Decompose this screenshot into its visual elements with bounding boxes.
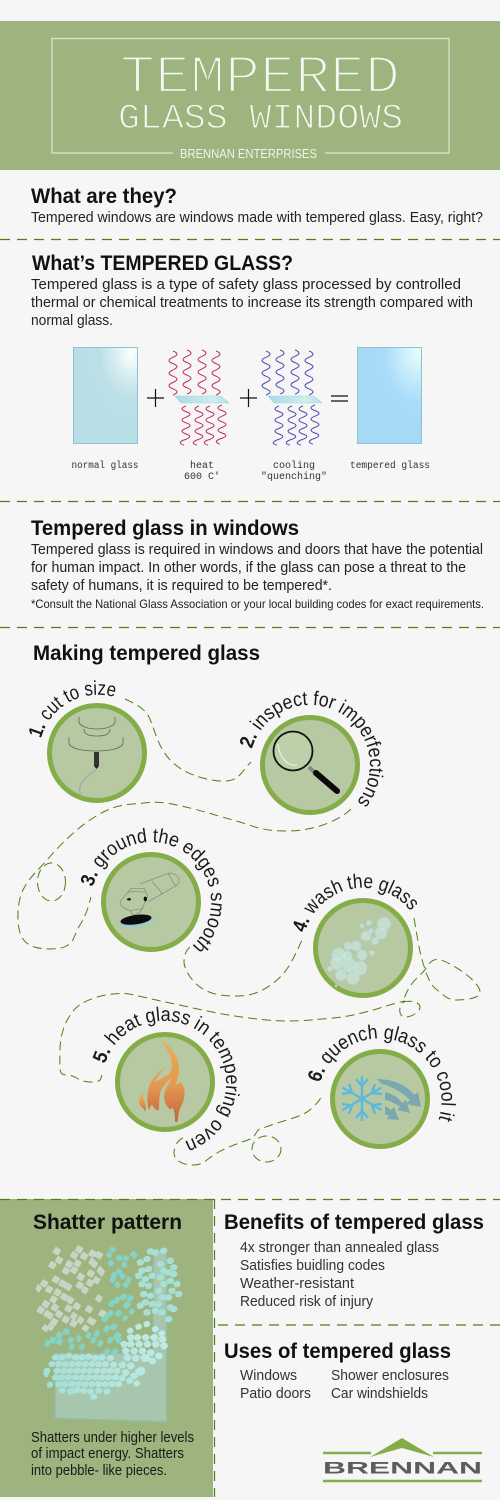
label: 2. inspect for imperfections xyxy=(240,690,384,806)
panel: shatter pattern xyxy=(0,1199,213,1497)
icon: flame xyxy=(139,1040,185,1122)
captions: cooling xyxy=(273,460,315,472)
captions: normal glass xyxy=(72,460,138,472)
section: tempered glass in windows xyxy=(31,517,484,611)
title: TEMPERED xyxy=(120,48,400,109)
list: Shower enclosures xyxy=(331,1368,449,1384)
cooling waves and glass xyxy=(262,350,322,445)
list xyxy=(240,1240,439,1310)
list: Windows xyxy=(240,1368,297,1384)
body text xyxy=(31,541,483,594)
heading: Uses of tempered glass xyxy=(224,1340,451,1363)
heading: What are they? xyxy=(31,185,177,208)
body text: normal glass. xyxy=(31,312,113,329)
heading: What’s TEMPERED GLASS? xyxy=(32,252,293,275)
icon: glass cutter xyxy=(69,717,123,796)
heading: Tempered glass in windows xyxy=(31,517,299,540)
body text xyxy=(31,276,473,329)
step 2: inspect for imperfections xyxy=(240,690,384,815)
body text: Tempered glass is required in windows and doors that have the potential xyxy=(31,541,483,558)
equals sign xyxy=(331,396,348,401)
section: benefits xyxy=(224,1211,484,1310)
step 6: quench glass to cool it xyxy=(308,1024,456,1149)
normal glass xyxy=(74,348,138,444)
list xyxy=(240,1368,449,1402)
heading: Benefits of tempered glass xyxy=(224,1211,484,1234)
body text: thermal or chemical treatments to increase its strength compared with xyxy=(31,294,473,311)
body text: for human impact. In other words, if the glass can pose a threat to the xyxy=(31,559,466,576)
captions: 600 C' xyxy=(184,471,220,483)
heading: Shatter pattern xyxy=(33,1211,182,1234)
heat waves and glass xyxy=(169,350,229,445)
icon: snowflake xyxy=(342,1076,382,1121)
icon: soap bubbles xyxy=(328,918,390,987)
body text: Tempered glass is a type of safety glass processed by controlled xyxy=(31,276,461,293)
subtitle: GLASS WINDOWS xyxy=(118,99,403,139)
list: Weather-resistant xyxy=(240,1276,354,1292)
plus sign xyxy=(147,389,164,407)
captions xyxy=(72,460,430,483)
caption xyxy=(31,1430,194,1479)
company name: BRENNAN ENTERPRISES xyxy=(180,146,317,161)
section: what are they xyxy=(31,185,483,226)
body text: safety of humans, it is required to be tempered*. xyxy=(31,577,332,594)
body text: Tempered windows are windows made with tempered glass. Easy, right? xyxy=(31,209,483,226)
step 1: cut to size xyxy=(29,680,147,803)
section: what's tempered glass xyxy=(31,252,473,329)
title frame xyxy=(52,38,449,153)
diagram: glass tempering equation xyxy=(72,348,430,483)
dashed route between steps xyxy=(18,699,480,1165)
label: 5. heat glass in tempering oven xyxy=(92,1006,240,1150)
captions: heat xyxy=(190,460,214,472)
label: 6. quench glass to cool it xyxy=(308,1024,456,1122)
caption: of impact energy. Shatters xyxy=(31,1446,184,1462)
captions: "quenching" xyxy=(261,471,327,483)
step 4: wash the glass xyxy=(294,874,417,998)
list: Car windshields xyxy=(331,1386,428,1402)
icon: cooling arrows xyxy=(377,1079,421,1120)
label: 4. wash the glass xyxy=(294,874,417,932)
section: uses xyxy=(224,1340,451,1402)
caption: into pebble- like pieces. xyxy=(31,1463,167,1479)
label: 3. ground the edges smooth xyxy=(80,828,222,952)
list: Satisfies buidling codes xyxy=(240,1258,385,1274)
list: Reduced risk of injury xyxy=(240,1294,374,1310)
label: 1. cut to size xyxy=(29,680,116,738)
logo: Brennan: BRENNAN xyxy=(323,1460,482,1478)
icon: magnifying glass xyxy=(274,732,337,791)
caption: Shatters under higher levels xyxy=(31,1430,194,1446)
captions: tempered glass xyxy=(350,460,430,472)
illustration: shattered glass xyxy=(37,1246,182,1422)
tempered glass xyxy=(358,348,422,444)
header banner xyxy=(0,21,500,170)
step 3: ground the edges smooth xyxy=(80,828,222,952)
list: 4x stronger than annealed glass xyxy=(240,1240,439,1256)
step 5: heat glass in tempering oven xyxy=(92,1006,240,1150)
icon: angle grinder xyxy=(119,873,179,929)
plus sign xyxy=(240,389,257,407)
logo: Brennan xyxy=(323,1438,482,1481)
list: Patio doors xyxy=(240,1386,311,1402)
heading: making tempered glass: Making tempered glass xyxy=(33,642,260,665)
